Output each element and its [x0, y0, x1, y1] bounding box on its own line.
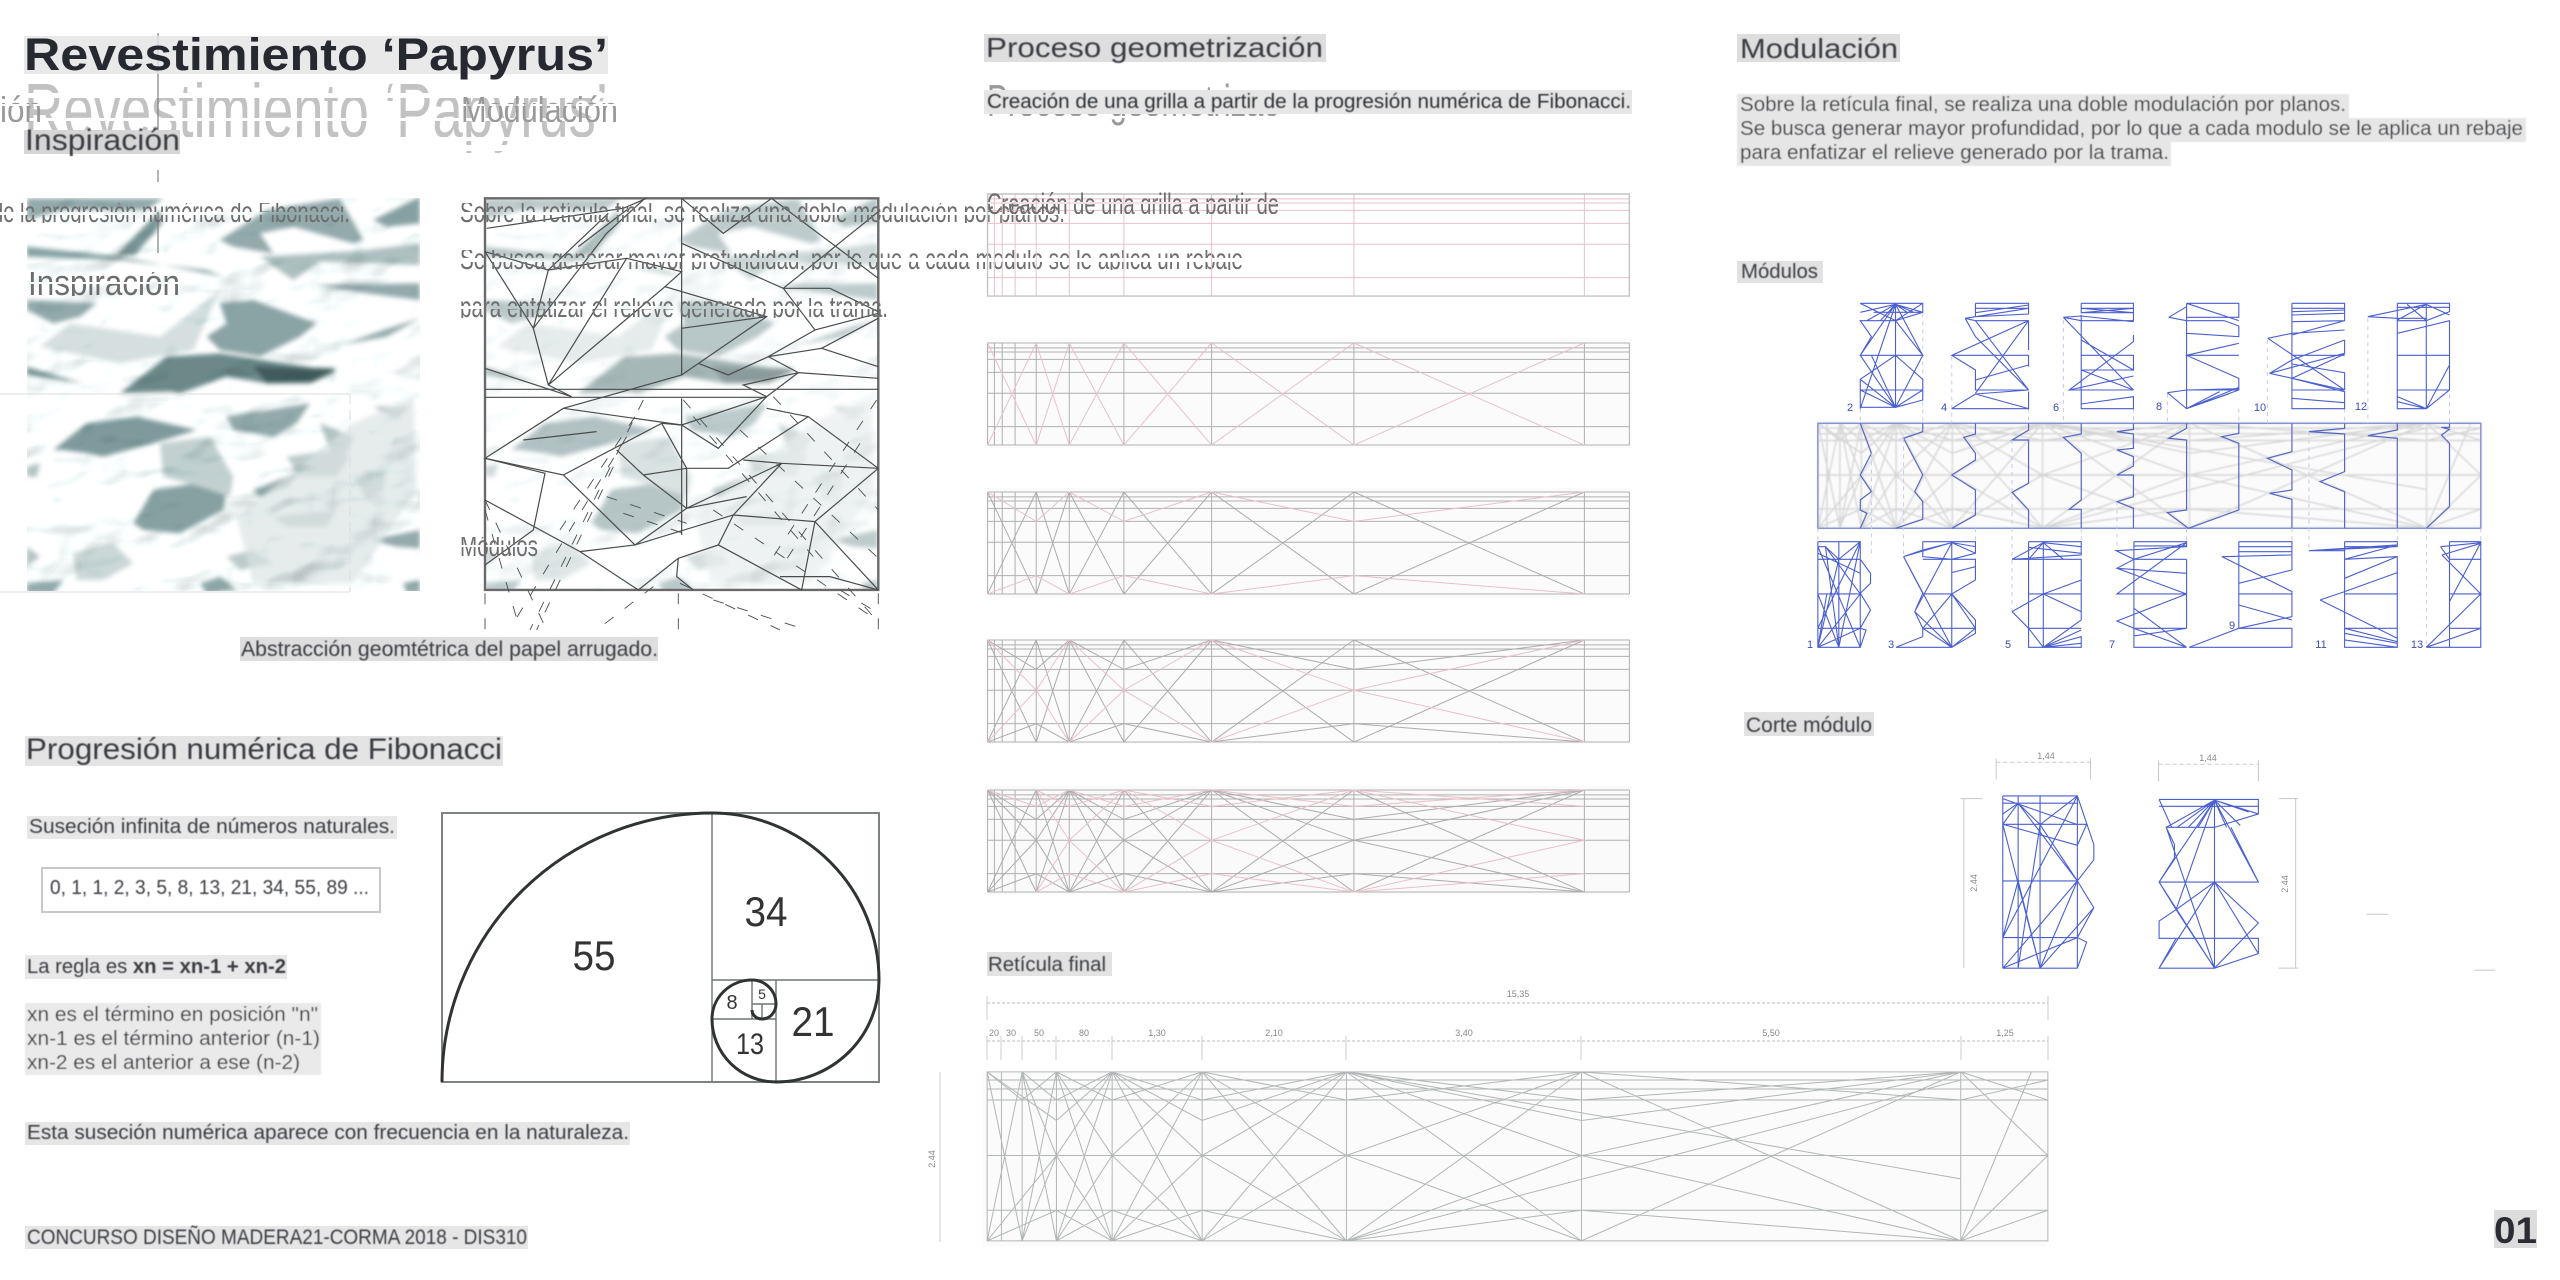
module 9	[2189, 542, 2292, 647]
text: rule explanation: xn-2 es el anterior a ese (n-2)	[27, 1052, 300, 1074]
dimension labels: 50	[1034, 1028, 1044, 1038]
grid 2	[985, 337, 1632, 448]
ghost heading Proceso: Proceso geometrizac	[987, 75, 1279, 126]
sequence box	[42, 868, 380, 912]
module numbers: 7	[2109, 639, 2115, 651]
page number: 01	[2494, 1210, 2537, 1251]
faint guide lines over photo	[0, 394, 350, 592]
footer: CONCURSO DISEÑO MADERA21-CORMA 2018 - DIS310	[27, 1225, 527, 1249]
ghost line: sobre la retícula: Sobre la retícula final, se realiza una doble modulación por planos.	[460, 196, 1065, 229]
module 2	[1860, 303, 1923, 409]
heading: Módulos: Módulos	[1741, 261, 1818, 283]
text: creación de una grilla: Creación de una grilla a partir de la progresión numérica de Fibonacci.	[987, 90, 1631, 113]
text: modulación description: Sobre la retícula final, se realiza una doble modulación por planos.	[1740, 94, 2346, 116]
grid 4	[985, 638, 1632, 744]
section dimension labels	[1969, 751, 2290, 893]
dimension labels	[989, 989, 2014, 1038]
dimension labels: 15,35	[1507, 989, 1529, 999]
text: rule: La regla es xn = xn-1 + xn-2	[27, 956, 286, 978]
blue module profiles	[1818, 423, 2481, 528]
heading: Corte módulo: Corte módulo	[1746, 714, 1872, 737]
ghost heading fragment: ión	[0, 89, 42, 130]
dashed construction lines	[485, 397, 878, 630]
fibonacci numbers: 5	[758, 986, 766, 1002]
photo: geometric abstraction of paper	[485, 197, 878, 630]
sequence box: 0, 1, 1, 2, 3, 5, 8, 13, 21, 34, 55, 89 ...	[50, 877, 369, 899]
text: nature: Esta suseción numérica aparece con frecuencia en la naturaleza.	[27, 1122, 629, 1144]
height dimension	[939, 1072, 941, 1242]
module numbers	[1807, 401, 2423, 651]
dimension labels: 80	[1079, 1028, 1089, 1038]
ghost line: para enfatizar: para enfatizar el relieve generado por la trama.	[460, 291, 888, 324]
module 8	[2167, 303, 2239, 409]
section dimension labels: 2.44	[2280, 875, 2290, 893]
module numbers: 8	[2156, 401, 2162, 413]
dimension labels: 5,50	[1762, 1028, 1780, 1038]
module 11	[2309, 542, 2397, 647]
module 6	[2063, 303, 2133, 409]
text: modulación description	[1737, 94, 2526, 166]
module 10	[2268, 303, 2345, 409]
dimension labels: 2,10	[1265, 1028, 1283, 1038]
spiral curve	[442, 813, 879, 1082]
fibonacci numbers: 13	[736, 1028, 764, 1061]
ghost title: Revestimiento ‘Papyrus’	[24, 69, 608, 154]
caption: Abstracción geomtétrica del papel arrugado.	[241, 638, 658, 661]
module numbers: 6	[2053, 402, 2059, 414]
central module band	[1818, 423, 2481, 528]
dimension labels: 20	[989, 1028, 999, 1038]
text: modulación description: para enfatizar el relieve generado por la trama.	[1740, 142, 2169, 164]
text: rule explanation: xn-1 es el término anterior (n-1)	[27, 1028, 320, 1050]
section dimension labels: 2.44	[1969, 874, 1979, 892]
module 5	[2012, 542, 2081, 647]
ghost line: inspiración: Inspiración	[28, 263, 180, 304]
module numbers: 2	[1847, 402, 1853, 414]
module 7	[2116, 542, 2187, 647]
grid 3	[985, 488, 1632, 598]
ghost heading Modulación: Modulación	[461, 89, 618, 130]
dimension lines final grid	[927, 989, 2048, 1242]
module numbers: 9	[2229, 620, 2235, 632]
module numbers: 12	[2355, 401, 2367, 413]
fibonacci numbers: 55	[572, 932, 616, 979]
ghost line: módulos: Módulos	[460, 530, 538, 563]
section modules	[2003, 796, 2258, 968]
photo: crumpled paper	[27, 197, 420, 593]
heading: Proceso geometrización: Proceso geometrización	[986, 32, 1323, 63]
grid 1	[988, 194, 1629, 296]
module 1	[1818, 542, 1871, 647]
module drawings	[1818, 303, 2481, 647]
text: rule explanation: xn es el término en posición "n"	[27, 1004, 318, 1026]
module 4	[1952, 303, 2029, 409]
ghost line: se busca: Se busca generar mayor profundidad, por lo que a cada modulo se le aplica un rebaje	[460, 243, 1243, 276]
module 3	[1896, 542, 1975, 647]
fibonacci numbers: 8	[726, 992, 738, 1014]
module numbers: 13	[2411, 639, 2423, 651]
section dimension labels: 1,44	[2037, 751, 2055, 761]
section dimension labels: 1,44	[2199, 753, 2217, 763]
dimension lines final grid: 2.44	[927, 1150, 937, 1168]
module numbers: 1	[1807, 639, 1813, 651]
text: sucesión: Suseción infinita de números naturales.	[29, 816, 395, 838]
heading: Modulación: Modulación	[1740, 33, 1898, 64]
heading: Retícula final: Retícula final	[988, 954, 1106, 976]
fibonacci numbers: 21	[792, 998, 834, 1045]
ghost line: progresión: de la progresión numérica de Fibonacci.	[0, 196, 350, 229]
fibonacci spiral diagram	[442, 813, 879, 1082]
dimension labels: 1,30	[1148, 1028, 1166, 1038]
dimension labels: 30	[1006, 1028, 1016, 1038]
module 13	[2426, 542, 2481, 647]
module numbers: 4	[1941, 402, 1947, 414]
dimension labels: 1,25	[1996, 1028, 2014, 1038]
text: modulación description: Se busca generar mayor profundidad, por lo que a cada modulo se le aplica un rebaje	[1740, 118, 2523, 140]
module numbers: 5	[2005, 639, 2011, 651]
vertical dashed guide	[157, 33, 159, 253]
grid 5	[985, 786, 1632, 894]
dashed module connectors	[1818, 313, 2481, 647]
fibonacci numbers: 34	[744, 888, 788, 935]
heading: Inspiración: Inspiración	[25, 124, 180, 157]
module numbers: 10	[2254, 402, 2266, 414]
section dimensions	[1961, 751, 2495, 970]
module numbers: 11	[2315, 639, 2327, 651]
final grid	[983, 1072, 2048, 1247]
heading: Fibonacci: Progresión numérica de Fibonacci	[26, 733, 502, 766]
ghost body text	[0, 196, 1243, 563]
section module left	[2003, 796, 2094, 968]
geometric polygon lines	[485, 198, 878, 630]
module numbers: 3	[1888, 639, 1894, 651]
text: rule explanation	[25, 1003, 321, 1075]
fibonacci numbers	[572, 888, 834, 1061]
dimension labels: 3,40	[1455, 1028, 1473, 1038]
module 12	[2368, 303, 2450, 409]
ghost text: creación: Creación de una grilla a partir de	[987, 188, 1279, 221]
section module right	[2159, 799, 2258, 968]
title: Revestimiento ‘Papyrus’	[24, 29, 608, 80]
